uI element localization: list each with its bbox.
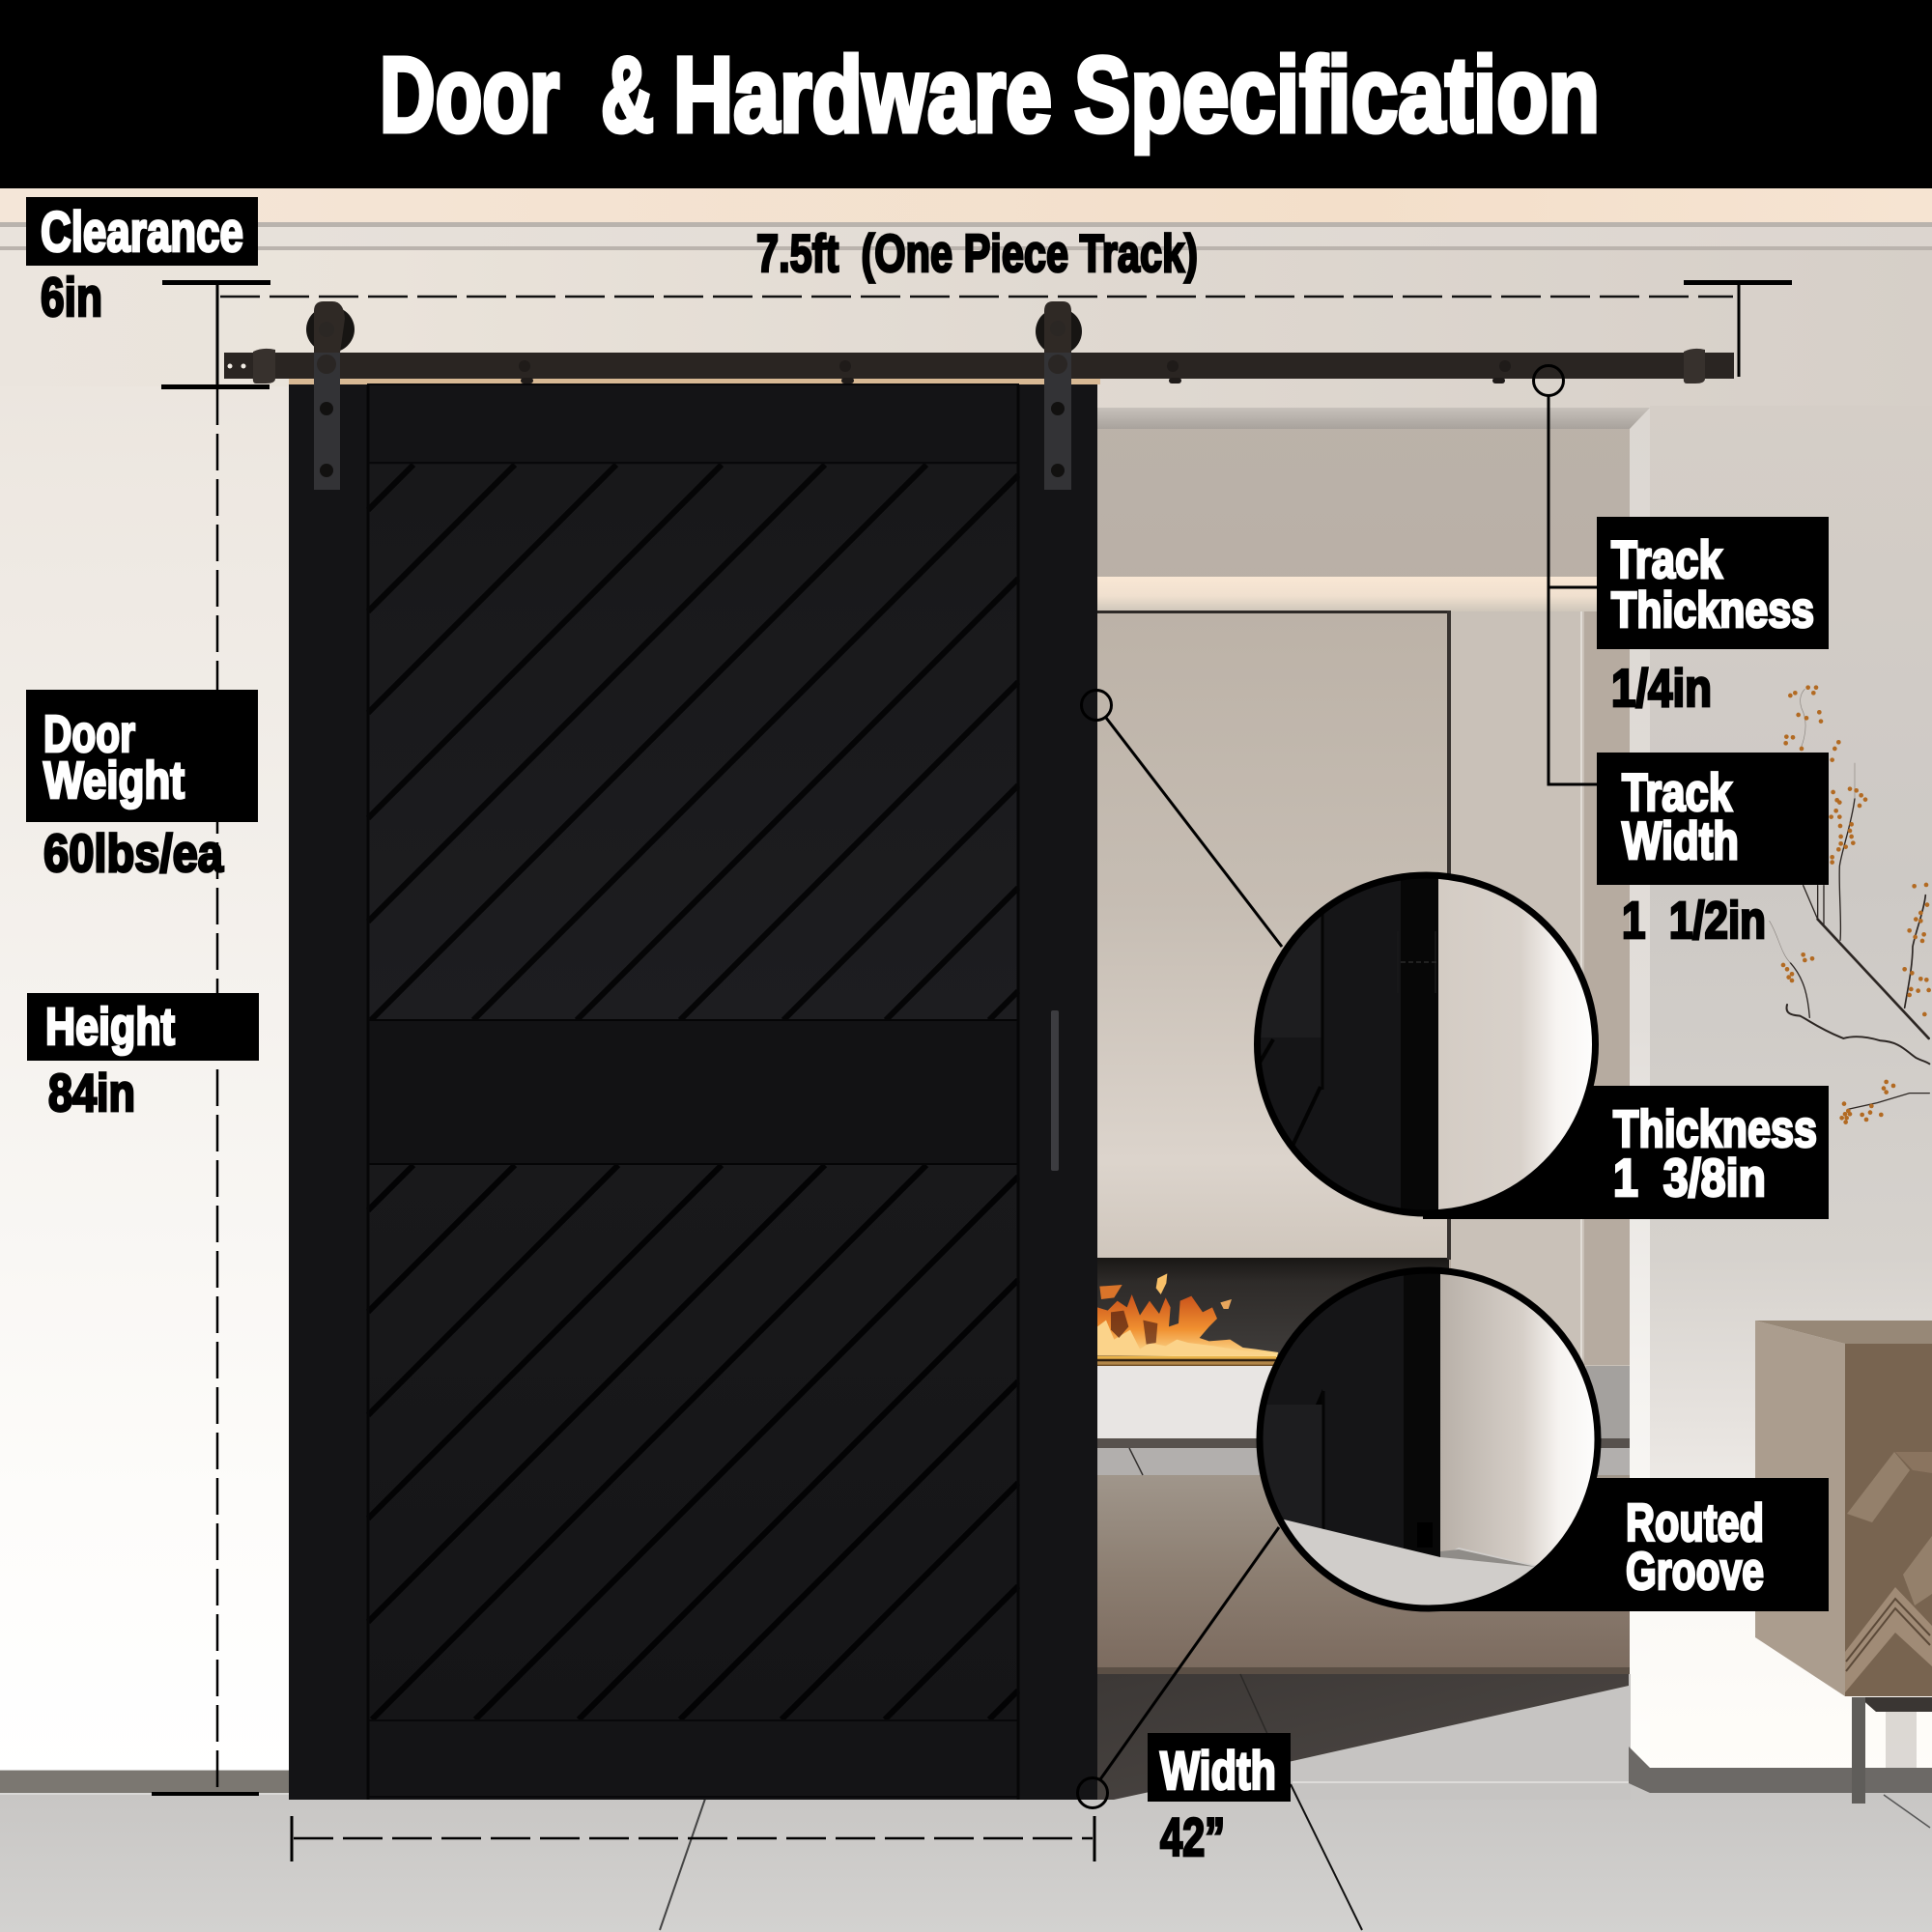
- track thickness label: Track: [1611, 529, 1722, 589]
- track width value: 1 1/2in: [1622, 892, 1766, 950]
- track lag bolts: [519, 360, 1511, 384]
- clearance label: Clearance: [41, 201, 243, 264]
- top rail: [368, 384, 1018, 463]
- clearance dimension bracket: [161, 282, 270, 386]
- lower diagonal panel: [368, 1165, 1018, 1719]
- title text: Specification: [1074, 36, 1600, 155]
- flames: [1097, 1273, 1278, 1365]
- bottom rail: [368, 1720, 1018, 1797]
- door thickness marker and leader: [1082, 690, 1282, 947]
- door weight label: Weight: [43, 752, 185, 810]
- thickness label: Thickness: [1613, 1100, 1817, 1158]
- track width label: [1597, 753, 1829, 885]
- thickness detail magnifier: [1255, 872, 1603, 1216]
- title banner: [0, 0, 1932, 188]
- width value: 42”: [1160, 1806, 1225, 1867]
- routed groove label: Routed: [1626, 1492, 1764, 1552]
- right hanger: [1036, 301, 1082, 490]
- height value: 84in: [48, 1063, 135, 1122]
- plant with berries: [1770, 685, 1931, 1124]
- right baseboard: [1629, 1747, 1932, 1793]
- door jamb and right wall pillar: [1630, 408, 1650, 1771]
- track thickness value: 1/4in: [1611, 658, 1712, 718]
- fireplace: [1097, 1258, 1630, 1674]
- track width label: Width: [1622, 810, 1739, 870]
- track width label: Track: [1622, 762, 1732, 822]
- right end stop: [1684, 349, 1705, 384]
- door weight label: Door: [43, 705, 135, 763]
- track callout marker and leader: [1534, 365, 1597, 784]
- track thickness label: [1597, 517, 1829, 649]
- width label: Width: [1160, 1740, 1276, 1801]
- left hanger: [306, 301, 355, 490]
- title text: &: [601, 36, 654, 155]
- right track end bracket: [1684, 282, 1792, 377]
- title text: Door: [380, 36, 559, 155]
- barn door: [289, 384, 1097, 1800]
- routed groove detail magnifier: [1255, 1268, 1605, 1613]
- door weight label: [26, 690, 258, 822]
- door handle: [1051, 1010, 1059, 1171]
- track thickness label: Thickness: [1611, 582, 1814, 639]
- height label: [27, 993, 259, 1061]
- left baseboard: [0, 1771, 289, 1793]
- sliding track: [224, 349, 1734, 384]
- door weight value: 60lbs/ea: [43, 823, 223, 883]
- title text: Hardware: [673, 36, 1052, 155]
- width dimension line: [292, 1816, 1094, 1861]
- routed groove label: Groove: [1626, 1541, 1764, 1601]
- routed groove label: [1430, 1478, 1829, 1611]
- track length dimension line: [220, 296, 1733, 298]
- height dimension line: [152, 388, 259, 1795]
- clearance value: 6in: [41, 267, 102, 328]
- left end stop: [253, 349, 275, 384]
- stile seams: [368, 384, 1018, 1800]
- doorway interior: [1097, 408, 1650, 1683]
- track length label: 7.5ft (One Piece Track): [756, 223, 1198, 283]
- upper diagonal panel: [368, 465, 1018, 1020]
- width marker and leader: [1078, 1527, 1279, 1808]
- thickness label: 1 3/8in: [1613, 1148, 1766, 1208]
- floor: [0, 1674, 1932, 1932]
- thickness label: [1423, 1086, 1829, 1219]
- middle rail: [368, 1020, 1018, 1164]
- title text: [380, 36, 1600, 155]
- height label: Height: [45, 998, 175, 1056]
- cabinet: [1755, 1321, 1932, 1804]
